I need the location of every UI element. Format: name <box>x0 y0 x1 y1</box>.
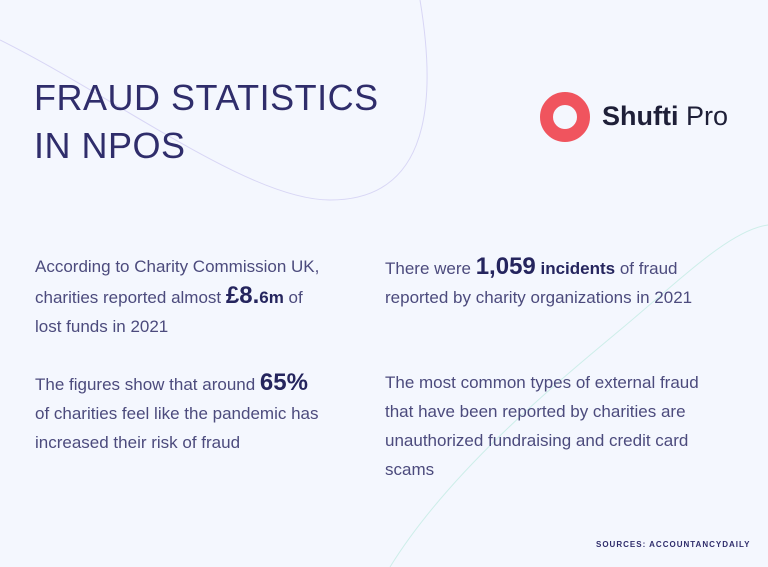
stat: lost funds <box>35 257 319 336</box>
logo <box>540 92 728 142</box>
sources: SOURCES: ACCOUNTANCYDAILY <box>596 540 750 549</box>
logo text: Shufti Pro <box>602 101 728 131</box>
stat: fraud types: that have been reported by charities are <box>385 402 686 421</box>
stat: lost funds: According to Charity Commission UK, <box>35 257 319 276</box>
title <box>34 77 379 166</box>
title: IN NPOS <box>34 125 186 166</box>
stat: incidents <box>385 253 692 307</box>
icon: logo ring <box>540 92 590 142</box>
stat: fraud types: unauthorized fundraising and credit card <box>385 431 688 450</box>
stat: fraud types: scams <box>385 460 434 479</box>
title: FRAUD STATISTICS <box>34 77 379 118</box>
stat: pandemic: increased their risk of fraud <box>35 433 240 452</box>
stat: pandemic <box>35 369 318 452</box>
stat: incidents: reported by charity organizations in 2021 <box>385 288 692 307</box>
stat: incidents: There were 1,059 incidents of fraud <box>385 253 678 280</box>
stat: lost funds: charities reported almost £8.6m of <box>35 282 303 309</box>
stat: lost funds: lost funds in 2021 <box>35 317 168 336</box>
stat: fraud types <box>385 373 699 479</box>
stat: pandemic: The figures show that around 65% <box>35 369 308 396</box>
stat: pandemic: of charities feel like the pandemic has <box>35 404 318 423</box>
stat: fraud types: The most common types of external fraud <box>385 373 699 392</box>
